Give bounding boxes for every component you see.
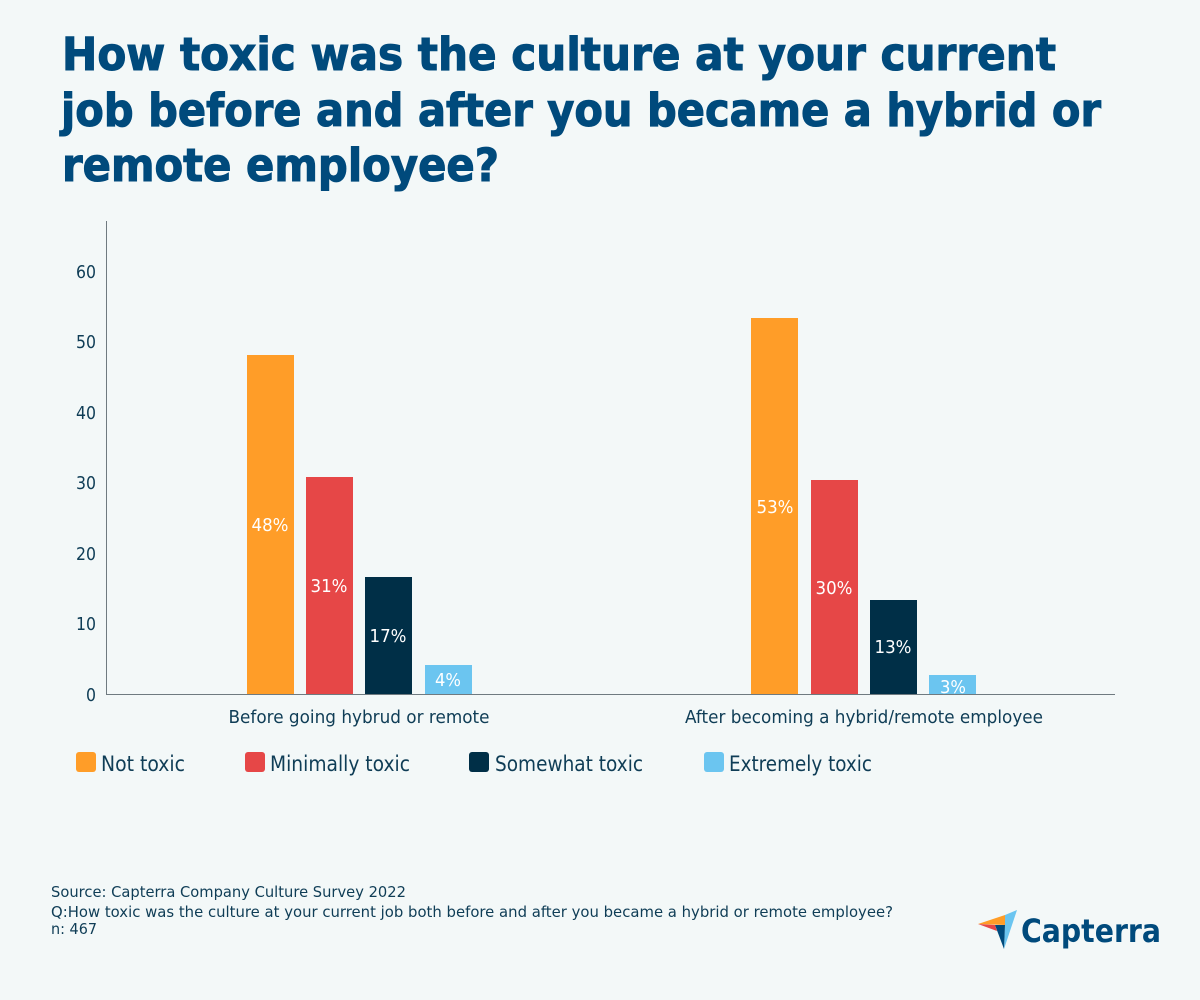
group: after becoming hybrid or remote: After becoming a hybrid/remote employee: [685, 707, 1043, 728]
title: job before and after you became a hybrid or: [59, 84, 1102, 137]
bar chart: [76, 221, 1115, 728]
group: after becoming hybrid or remote: 13%: [874, 637, 912, 658]
group: after becoming hybrid or remote: 3%: [940, 677, 966, 698]
y axis labels: 30: [76, 473, 96, 494]
legend: Not toxic: [101, 752, 185, 776]
group: before going hybrid or remote: 48%: [252, 515, 288, 536]
legend: [76, 752, 872, 776]
source note: Q:How toxic was the culture at your current job both before and after you became a hybrid or remote employee?: [51, 903, 893, 921]
y axis labels: 60: [76, 262, 96, 283]
title: remote employee?: [62, 139, 499, 192]
title: How toxic was the culture at your current: [62, 28, 1056, 81]
legend: Somewhat toxic: [495, 752, 643, 776]
y axis labels: 20: [76, 544, 96, 565]
y axis labels: 40: [76, 403, 96, 424]
source note: [51, 883, 893, 938]
group: before going hybrid or remote: Before going hybrud or remote: [228, 707, 490, 728]
legend: Extremely toxic: [729, 752, 872, 776]
group: after becoming hybrid or remote: 53%: [756, 497, 794, 518]
group: before going hybrid or remote: 4%: [435, 670, 461, 691]
group: after becoming hybrid or remote: [685, 318, 1043, 728]
source note: n: 467: [51, 920, 97, 938]
y axis labels: 0: [86, 685, 96, 706]
logo: Capterra: [978, 910, 1161, 950]
source note: Source: Capterra Company Culture Survey 2022: [51, 883, 406, 901]
y axis labels: [76, 262, 96, 706]
group: after becoming hybrid or remote: 30%: [816, 578, 852, 599]
legend: Minimally toxic: [270, 752, 410, 776]
y axis labels: 10: [76, 614, 96, 635]
group: before going hybrid or remote: [228, 355, 490, 728]
group: before going hybrid or remote: 17%: [370, 626, 406, 647]
y axis labels: 50: [76, 332, 96, 353]
title: [59, 28, 1102, 192]
logo: Capterra: Capterra: [1021, 912, 1161, 950]
group: before going hybrid or remote: 31%: [310, 576, 348, 597]
